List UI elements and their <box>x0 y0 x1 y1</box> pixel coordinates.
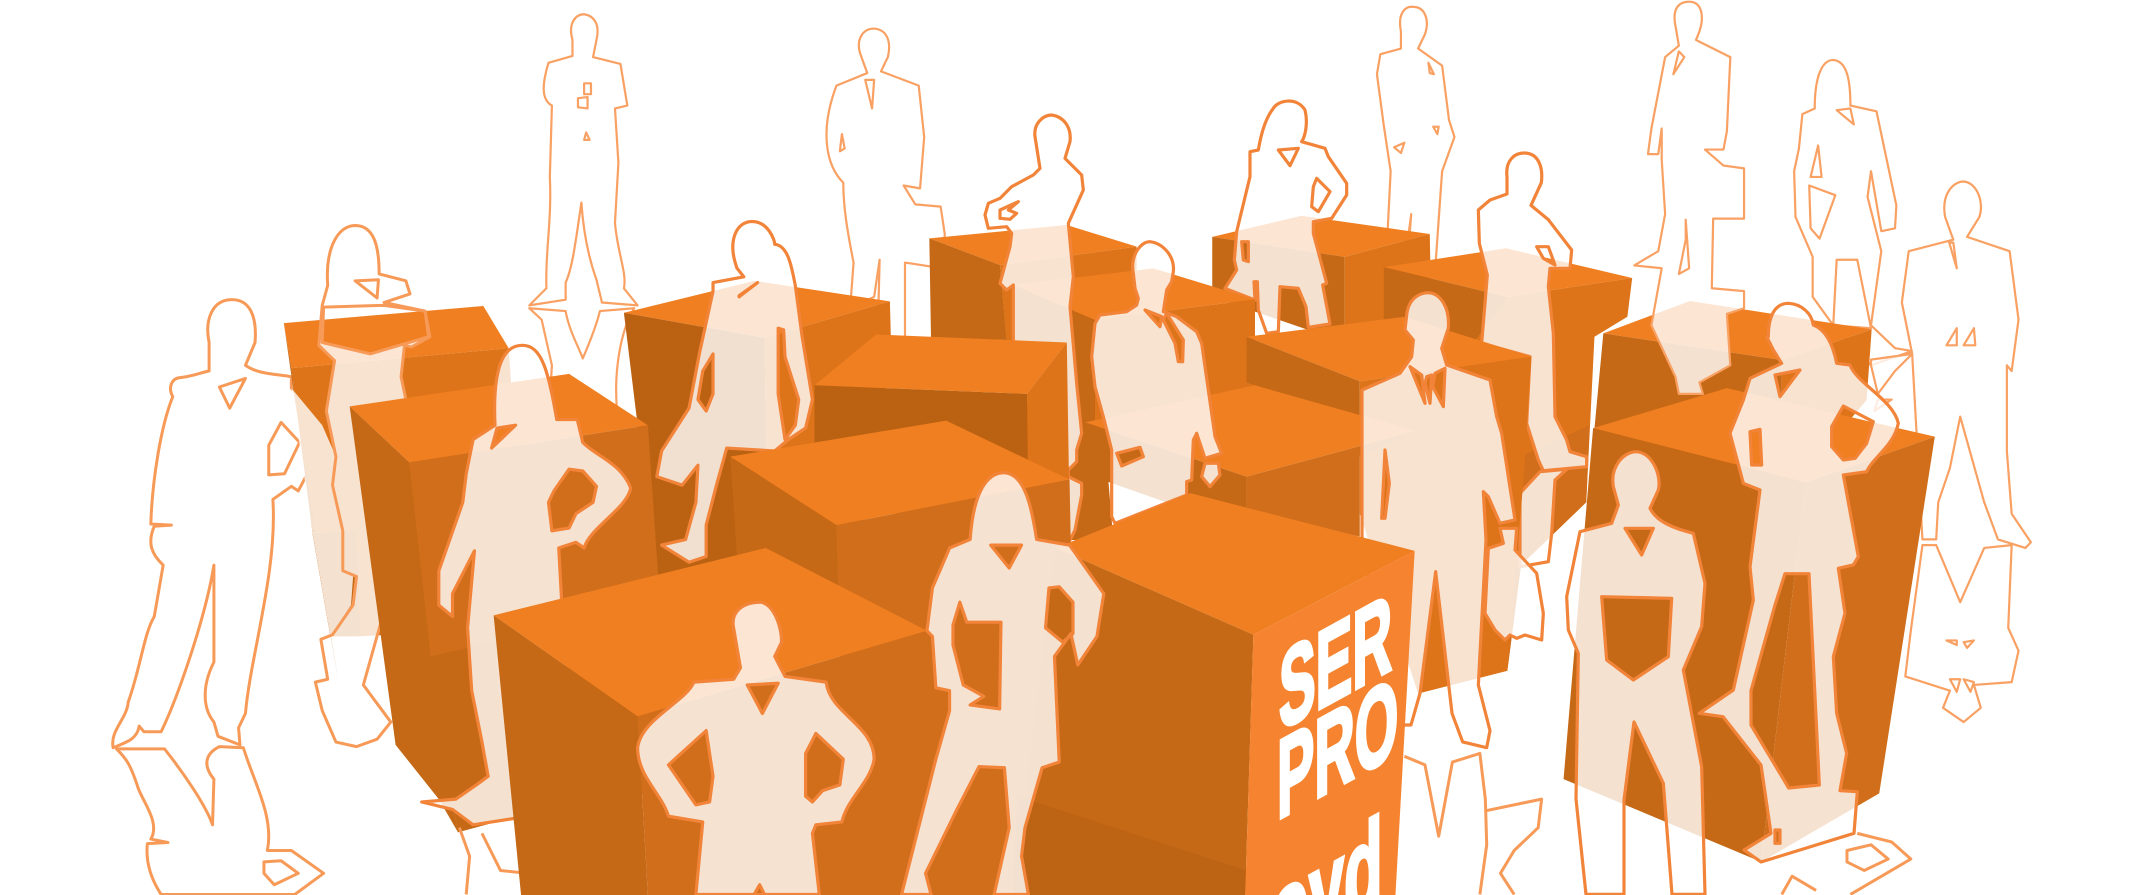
figure: man with arm bent, over back boxes <box>985 115 1083 540</box>
box: back right <box>1585 301 1872 533</box>
figure: back woman outline <box>1794 60 1912 365</box>
figure: back man with briefcase outline <box>827 29 945 342</box>
box: centre with dark front <box>814 334 1070 514</box>
brand text: SER PRO: PRO <box>1277 653 1398 845</box>
figure: woman over far left box <box>291 225 430 747</box>
figure: man with tie and pocket, centre <box>1092 242 1222 523</box>
figure: far right man outline <box>1871 182 2031 722</box>
box: centre low <box>1085 385 1416 537</box>
box: far left back <box>284 306 528 688</box>
box: far right large <box>1564 388 1935 862</box>
box: left second row <box>350 374 686 832</box>
brand text: SER PRO: SER <box>1279 569 1392 754</box>
box: back row left of centre <box>929 225 1137 343</box>
figure: centre back man outline <box>529 14 638 422</box>
box: front left large <box>494 548 1070 895</box>
figure: woman in dress front centre <box>902 473 1104 894</box>
figure: woman with hand on hip, left <box>422 345 631 894</box>
brand text: SER PRO <box>1270 569 1398 895</box>
figure: woman over second back box <box>657 221 812 562</box>
figure: woman with hand on hip, right top <box>1699 303 1898 862</box>
figure: man with leg raised over back box <box>1478 153 1587 567</box>
figure: back man right of centre outline <box>1377 7 1454 268</box>
figure: tall man with tie, centre-right <box>1362 293 1543 748</box>
box: centre back group <box>1013 268 1255 540</box>
figure: woman front centre-left with hands on hips <box>638 602 874 894</box>
figure: woman over back centre-right box <box>1225 101 1347 333</box>
figure: man with briefcase over right back box <box>1634 2 1744 394</box>
figure: far left man outline <box>113 300 333 894</box>
box: back row centre-right <box>1212 216 1432 365</box>
figure: woman with pocket, right front <box>1567 452 1705 894</box>
box: centre-right mid <box>1247 317 1531 694</box>
box: second back box left of centre <box>624 281 891 594</box>
figure: reflection outline bottom right <box>1782 833 1911 894</box>
box: centre second row <box>730 421 1073 656</box>
figure: reflection of tall man <box>1404 753 1542 894</box>
box: front centre with SERPRO brand <box>1013 493 1415 895</box>
box: back row right-of-centre <box>1384 248 1632 694</box>
